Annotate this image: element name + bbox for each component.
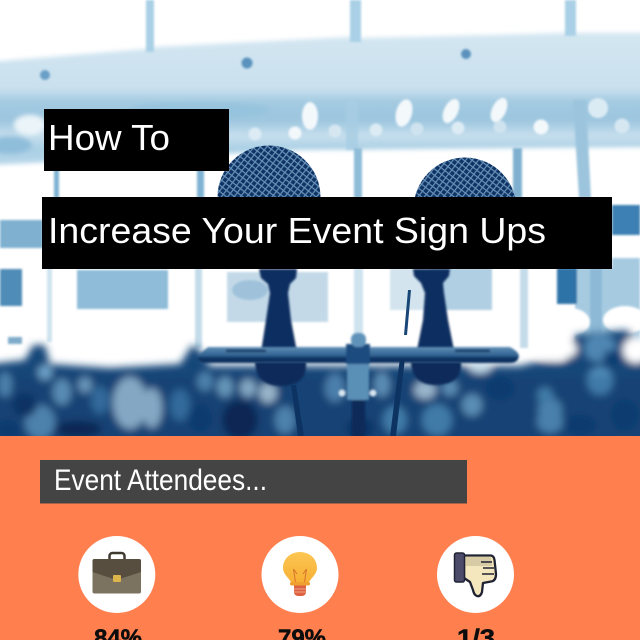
background windows and columns [0, 100, 640, 358]
title line: Increase Your Event Sign Ups [42, 197, 612, 269]
hero photo: microphones in front of a crowd [0, 0, 640, 446]
title line: How To [44, 109, 229, 171]
title line: Increase Your Event Sign Ups: Increase Your Event Sign Ups [48, 210, 546, 251]
orange lower panel [0, 436, 640, 640]
section heading: Event Attendees: Event Attendees... [54, 464, 267, 497]
blurred crowd [0, 330, 640, 446]
ceiling beam and windows [0, 33, 640, 165]
icon: thumbs down [437, 536, 514, 613]
icon: light bulb [262, 536, 338, 613]
right microphone [390, 158, 516, 436]
left microphone [218, 146, 320, 436]
white glare blobs at the crowd line [574, 304, 640, 336]
microphone tray and centre mic [197, 333, 519, 440]
ceiling posts and lights [40, 0, 630, 150]
section heading: Event Attendees [40, 460, 467, 504]
title line: How To: How To [48, 117, 170, 158]
icon: briefcase [78, 536, 155, 613]
